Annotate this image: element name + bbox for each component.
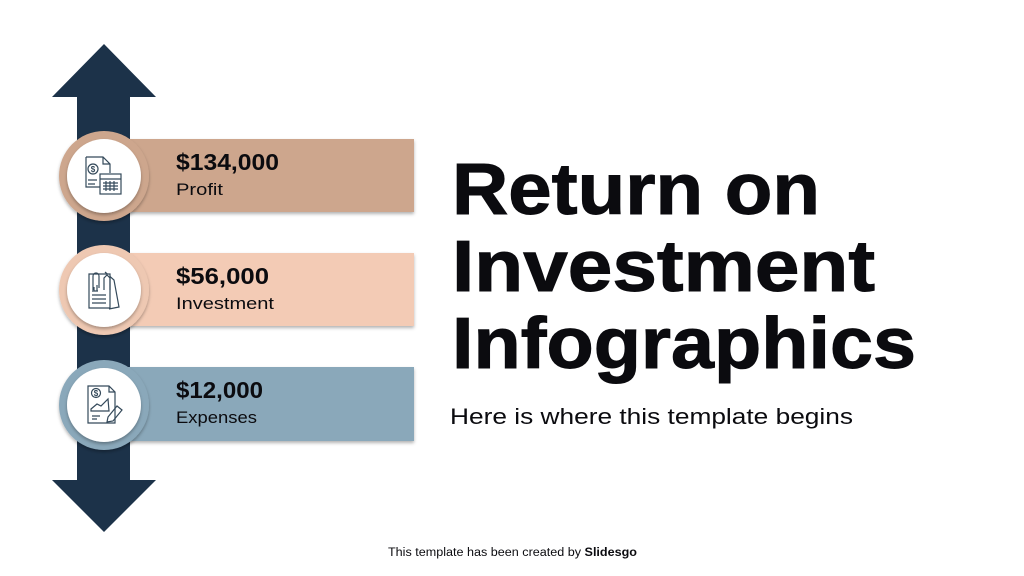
icon: document with calendar	[86, 157, 121, 194]
investment badge	[59, 245, 149, 335]
icon: document with calendar: $	[91, 165, 96, 174]
profit bar	[120, 139, 414, 212]
icon: clipped report	[89, 272, 119, 309]
profit label: Profit	[176, 180, 223, 199]
title: Return on	[452, 150, 820, 230]
footer credit: This template has been created by Slidesgo	[388, 547, 637, 559]
investment bar	[120, 253, 414, 326]
expenses badge	[59, 360, 149, 450]
double arrow	[52, 44, 156, 532]
investment value: $56,000	[176, 263, 269, 289]
expenses label: Expenses	[176, 408, 257, 427]
icon: report with pencil: $	[94, 389, 99, 398]
panel: investment	[59, 245, 414, 335]
investment label: Investment	[176, 294, 274, 313]
icon: report with pencil	[88, 386, 122, 423]
profit value: $134,000	[176, 149, 279, 175]
profit badge	[59, 131, 149, 221]
expenses bar	[120, 367, 414, 441]
subtitle: Here is where this template begins	[450, 404, 853, 429]
expenses value: $12,000	[176, 377, 263, 403]
panel: expenses	[59, 360, 414, 450]
panel: profit	[59, 131, 414, 221]
title: Infographics	[452, 304, 916, 384]
title: Investment	[452, 227, 875, 307]
title	[452, 150, 916, 384]
